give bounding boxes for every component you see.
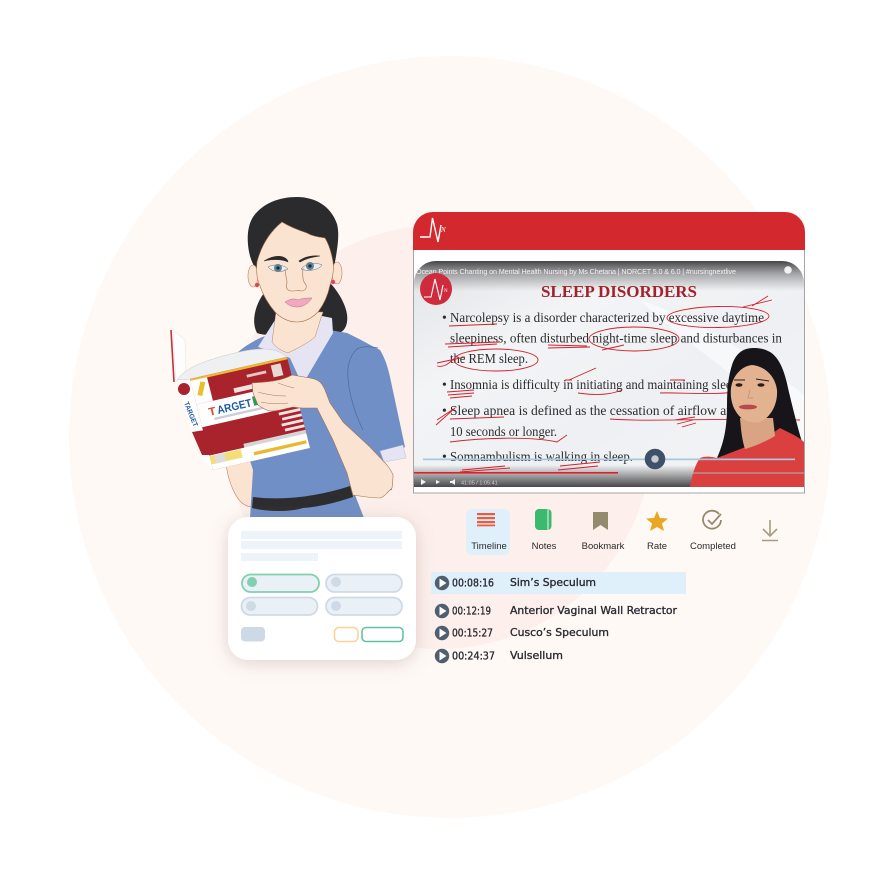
left ear [248,265,258,287]
slide body text: • [442,377,447,392]
face [257,222,333,322]
tab: Notes [532,509,557,552]
right hair tail [305,284,347,333]
neck [740,418,775,449]
earrings [255,283,259,287]
infographic canvas [69,56,831,818]
sleeve seam [348,347,378,430]
row: 00:08:16: 00:08:16 [452,578,494,590]
slide body text: • [442,310,447,325]
icon: download [762,520,778,540]
row: 00:15:27: Cusco’s Speculum [510,627,609,639]
grey button [241,627,265,642]
right eye [301,263,322,270]
tab: Rate: Rate [647,541,667,552]
eyebrows [264,256,288,262]
lavender collar [258,316,333,380]
lips [285,298,312,307]
slide body text: Narcolepsy is a disorder characterized by excessive daytime [450,310,764,325]
timeline list [431,572,686,663]
seek slider [423,452,795,466]
tab: Rate [646,511,668,552]
slide body text: 10 seconds or longer. [450,424,557,439]
row: 00:08:16: Sim’s Speculum [510,577,596,589]
video title: Ocean Points Chanting on Mental Health Nursing by Ms Chetana | NORCET 5.0 & 6.0 | #nursingnextlive [416,267,736,276]
icon: header logo [420,218,446,242]
slide body text: Insomnia is difficulty in initiating and maintaining sleep [450,377,738,392]
front hair [780,428,796,436]
book pages [177,349,287,380]
row: 00:24:37: Vulsellum [510,650,563,662]
row: 00:15:27: 00:15:27 [452,628,493,640]
tab: Notes: Notes [532,541,557,552]
tab: Timeline: Timeline [471,541,507,552]
left arm below the book [225,458,256,507]
icon: channel logo [420,273,452,305]
book back cover [173,330,186,382]
icon: clock [784,266,792,274]
row: 00:15:27 [435,626,609,640]
presenter nose [748,390,753,398]
row: 00:24:37: 00:24:37 [452,650,495,662]
highlighted row [431,572,686,594]
left hair tail [254,293,285,335]
progress bar [693,472,804,474]
red header bar [413,212,805,250]
slide body text: • [442,449,447,464]
face [731,365,777,422]
video frame [414,261,805,487]
player controls: 41:05 / 1:05:41 [461,480,498,486]
slide body text [442,310,782,464]
player controls [421,479,498,485]
spine title: TARGET [182,401,199,428]
presenter eyes and brows [736,383,742,387]
row: 00:24:37 [435,649,563,663]
slide heading: SLEEP DISORDERS [541,282,697,301]
hair top [248,197,338,272]
option 3 [242,598,318,615]
finger lines [258,383,294,404]
option: selected [242,574,319,592]
slide body text: Sleep apnea is defined as the cessation of airflow at the [450,403,750,418]
red annotations [436,296,800,472]
row: 00:12:19 [435,604,678,618]
toolbar: video actions [466,509,778,555]
blouse [690,428,805,487]
slide body text: Somnambulism is walking in sleep. [450,449,633,464]
icon: header logo: N [440,226,446,234]
panel: quiz card [228,517,416,660]
book spine [177,379,213,470]
slide body text: the REM sleep. [450,351,528,366]
background: inner pink circle [228,225,652,649]
slide body text: • [442,403,447,418]
tab: Completed [690,511,736,552]
option 2 [326,574,402,592]
presenter [690,348,805,487]
presenter mouth [739,405,757,409]
background: large pale circle [69,56,831,818]
neck [272,312,323,353]
illustration: student reading a book [171,197,406,518]
player frame [414,232,804,493]
right ear [332,262,342,284]
left eye [268,265,288,271]
row: 00:08:16 [435,576,596,590]
book front cover [190,357,310,470]
tab: Bookmark [582,512,625,552]
panel: video player [413,212,805,493]
tab: Completed: Completed [690,541,736,552]
tab: Bookmark: Bookmark [582,541,625,552]
row: 00:12:19: Anterior Vaginal Wall Retractor [510,605,678,617]
slide body text: sleepiness, often disturbed night-time sleep and disturbances in [450,330,782,346]
option 4 [326,598,402,615]
green button [362,628,403,642]
book title: ARGET [216,397,253,417]
tab: Timeline [466,509,510,555]
orange button [334,628,358,642]
book front cover: T [207,405,217,419]
nose [285,268,306,291]
hand and forearm holding the book [252,375,393,498]
back hair [717,348,802,458]
icon: channel logo: N [444,289,448,294]
belt [252,486,353,511]
sleeve cuff [380,445,406,462]
row: 00:12:19: 00:12:19 [452,606,491,618]
blue uniform [230,330,405,518]
question lines [241,531,402,561]
